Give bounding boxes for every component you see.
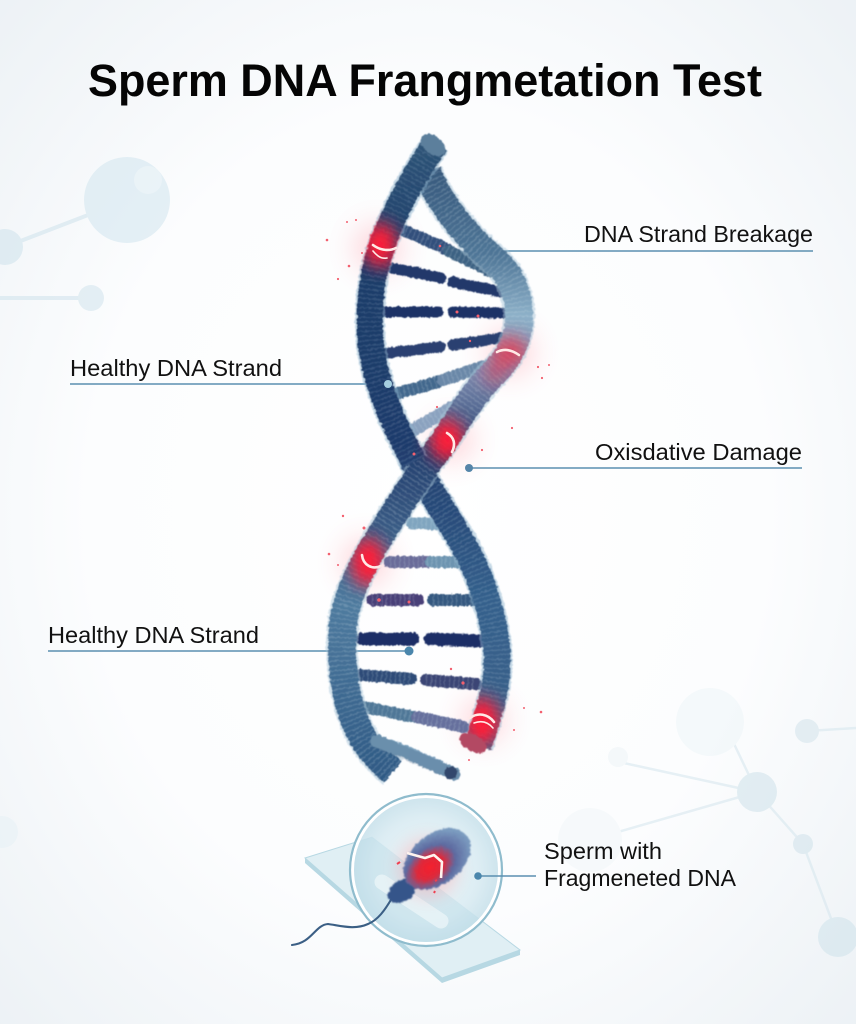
red particles bbox=[326, 219, 550, 761]
callout: sperm with fragmented DNA: Fragmeneted DNA bbox=[544, 865, 737, 891]
top cap of strand bbox=[416, 129, 450, 161]
decorative molecule: top left bbox=[0, 157, 170, 311]
white crack marks bbox=[362, 245, 519, 728]
callout: oxidative damage: Oxisdative Damage bbox=[595, 439, 802, 465]
red glow behind helix bbox=[342, 224, 534, 742]
microscope slide bbox=[305, 837, 520, 983]
sperm cell with fragmented DNA bbox=[292, 816, 482, 945]
DNA double helix bbox=[342, 129, 528, 780]
callout: sperm with fragmented DNA: Sperm with bbox=[544, 838, 662, 864]
base-pair rungs bbox=[358, 231, 505, 727]
lower healthy strand marker bbox=[404, 646, 414, 656]
rung hatch texture bbox=[358, 231, 492, 727]
callout: healthy DNA strand lower: Healthy DNA Strand bbox=[48, 622, 259, 648]
callout: DNA strand breakage: DNA Strand Breakage bbox=[584, 221, 813, 247]
decorative molecule: bottom right bbox=[0, 688, 856, 957]
strand texture layer bbox=[342, 143, 519, 772]
magnifier lens bbox=[348, 792, 504, 948]
bottom rung bbox=[377, 741, 458, 780]
callout: healthy DNA strand upper: Healthy DNA Strand bbox=[70, 355, 282, 381]
callout: oxidative damage bbox=[465, 439, 802, 472]
callout: sperm with fragmented DNA bbox=[474, 838, 737, 891]
title: Sperm DNA Frangmetation Test bbox=[88, 55, 762, 106]
bottom cap of strand bbox=[456, 729, 490, 757]
damage hot spots on strands bbox=[351, 223, 528, 746]
upper healthy strand marker bbox=[384, 380, 392, 388]
